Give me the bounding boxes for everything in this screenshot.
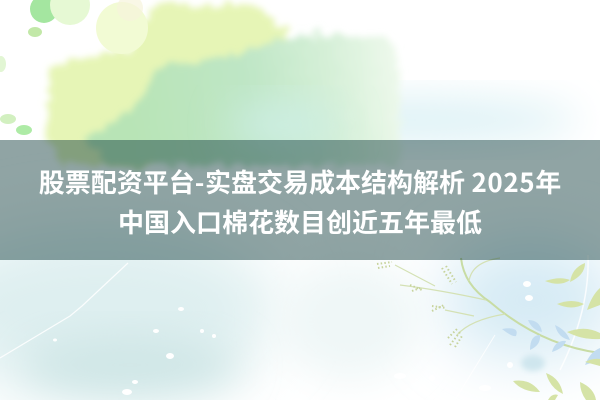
seed clusters (377, 262, 462, 347)
blue-grey lower wash (0, 98, 600, 395)
title: 股票配资平台-实盘交易成本结构解析 2025年 (39, 163, 561, 200)
pale circle highlights (0, 0, 148, 135)
plant branch (377, 258, 600, 400)
yellow-green paint splash (46, 4, 292, 165)
green paint splash (85, 34, 400, 165)
title: 中国入口棉花数目创近五年最低 (118, 202, 482, 240)
blue leaves (502, 320, 600, 365)
white sparkles and thin line (0, 255, 588, 400)
title band (0, 140, 600, 260)
title (39, 163, 561, 240)
green leaves (513, 263, 600, 400)
